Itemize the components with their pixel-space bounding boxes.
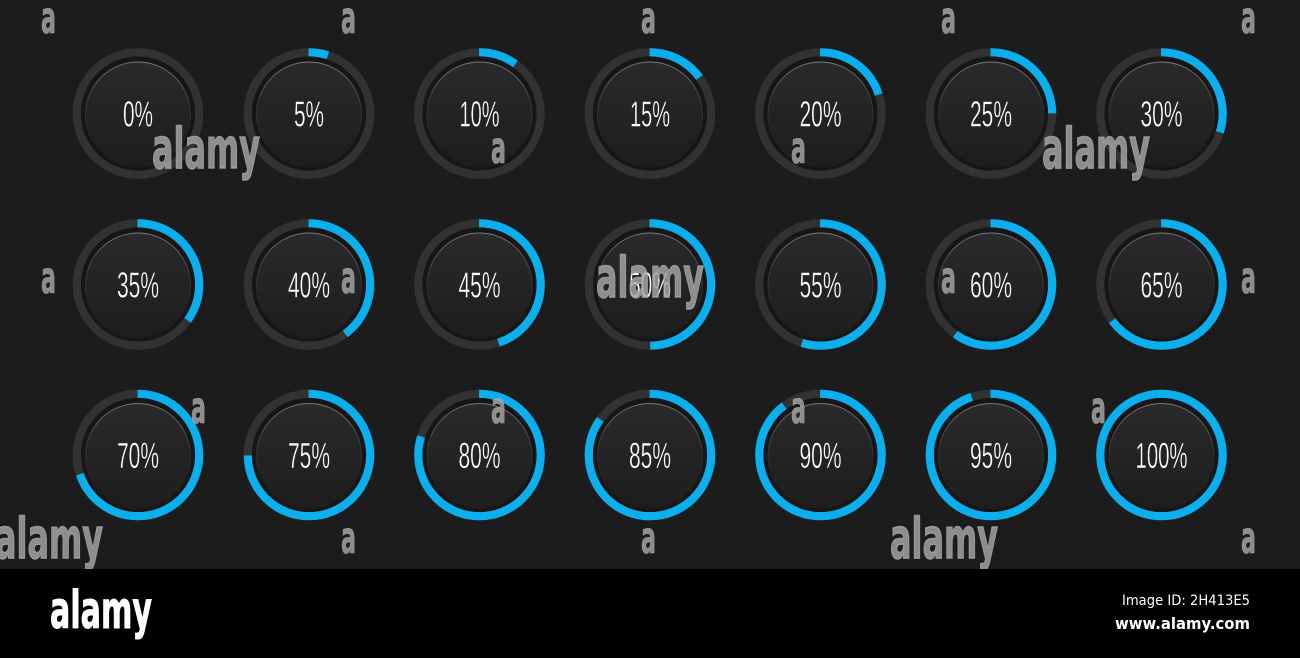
large watermarks: alamy xyxy=(0,507,103,572)
gauge 80% xyxy=(418,394,541,516)
small watermark letters: a xyxy=(341,513,356,564)
large watermarks xyxy=(0,117,1150,572)
gauge 70%: 70% xyxy=(117,435,159,476)
small watermark letters: a xyxy=(1091,383,1106,434)
gauge 100%: 100% xyxy=(1136,435,1187,476)
gauge 35%: 35% xyxy=(117,265,159,306)
small watermark letters: a xyxy=(191,383,206,434)
gauge 100% xyxy=(1100,394,1223,516)
large watermarks: alamy xyxy=(1042,117,1150,182)
gauge 15% xyxy=(589,52,711,175)
gauge 40%: 40% xyxy=(288,265,330,306)
gauge 20%: 20% xyxy=(800,94,842,135)
large watermarks: alamy xyxy=(890,507,998,572)
gauge 60%: 60% xyxy=(970,265,1012,306)
gauge grid xyxy=(77,52,1223,516)
gauge 0% xyxy=(77,52,199,175)
small watermark letters: a xyxy=(491,383,506,434)
gauge 50%: 50% xyxy=(629,265,671,306)
gauge 65%: 65% xyxy=(1140,265,1182,306)
gauge 40% xyxy=(248,223,370,346)
gauge 25%: 25% xyxy=(970,94,1012,135)
gauge 5%: 5% xyxy=(294,94,324,135)
gauge 70% xyxy=(77,394,199,516)
image id: Image ID: 2H413E5 xyxy=(1122,593,1250,609)
small watermark letters: a xyxy=(791,123,806,174)
small watermark letters: a xyxy=(791,383,806,434)
gauge 55%: 55% xyxy=(800,265,842,306)
gauge 5% xyxy=(248,52,370,175)
small watermark letters: a xyxy=(941,253,956,304)
gauge 30%: 30% xyxy=(1140,94,1182,135)
gauge 45%: 45% xyxy=(458,265,500,306)
gauge 85% xyxy=(589,394,711,516)
small watermark letters: a xyxy=(341,253,356,304)
gauge 0%: 0% xyxy=(123,94,153,135)
gauge 30% xyxy=(1100,52,1223,175)
gauge 20% xyxy=(759,52,882,175)
gauge 95%: 95% xyxy=(970,435,1012,476)
website: www.alamy.com xyxy=(1115,614,1250,633)
small watermark letters: a xyxy=(491,123,506,174)
large watermarks: alamy xyxy=(596,246,704,311)
gauge 25% xyxy=(930,52,1052,175)
small watermark letters: a xyxy=(1241,513,1256,564)
gauge 10% xyxy=(418,52,541,175)
large watermarks: alamy xyxy=(152,117,260,182)
gauge 50% xyxy=(589,223,711,346)
gauge 55% xyxy=(759,223,882,346)
footer logo: alamy xyxy=(50,581,152,641)
gauge 75% xyxy=(248,394,370,516)
gauge 65% xyxy=(1100,223,1223,346)
gauge 60% xyxy=(930,223,1052,346)
gauge 85%: 85% xyxy=(629,435,671,476)
gauge 90% xyxy=(759,394,882,516)
gauge 90%: 90% xyxy=(800,435,842,476)
footer bar xyxy=(0,569,1300,658)
small watermark letters: a xyxy=(1241,253,1256,304)
gauge 45% xyxy=(418,223,541,346)
gauge 75%: 75% xyxy=(288,435,330,476)
small watermark letters: a xyxy=(41,253,56,304)
gauge 35% xyxy=(77,223,199,346)
small watermark letters: a xyxy=(641,513,656,564)
gauge 15%: 15% xyxy=(630,94,670,135)
gauge 80%: 80% xyxy=(458,435,500,476)
gauge 10%: 10% xyxy=(460,94,500,135)
gauge 95% xyxy=(930,394,1052,516)
